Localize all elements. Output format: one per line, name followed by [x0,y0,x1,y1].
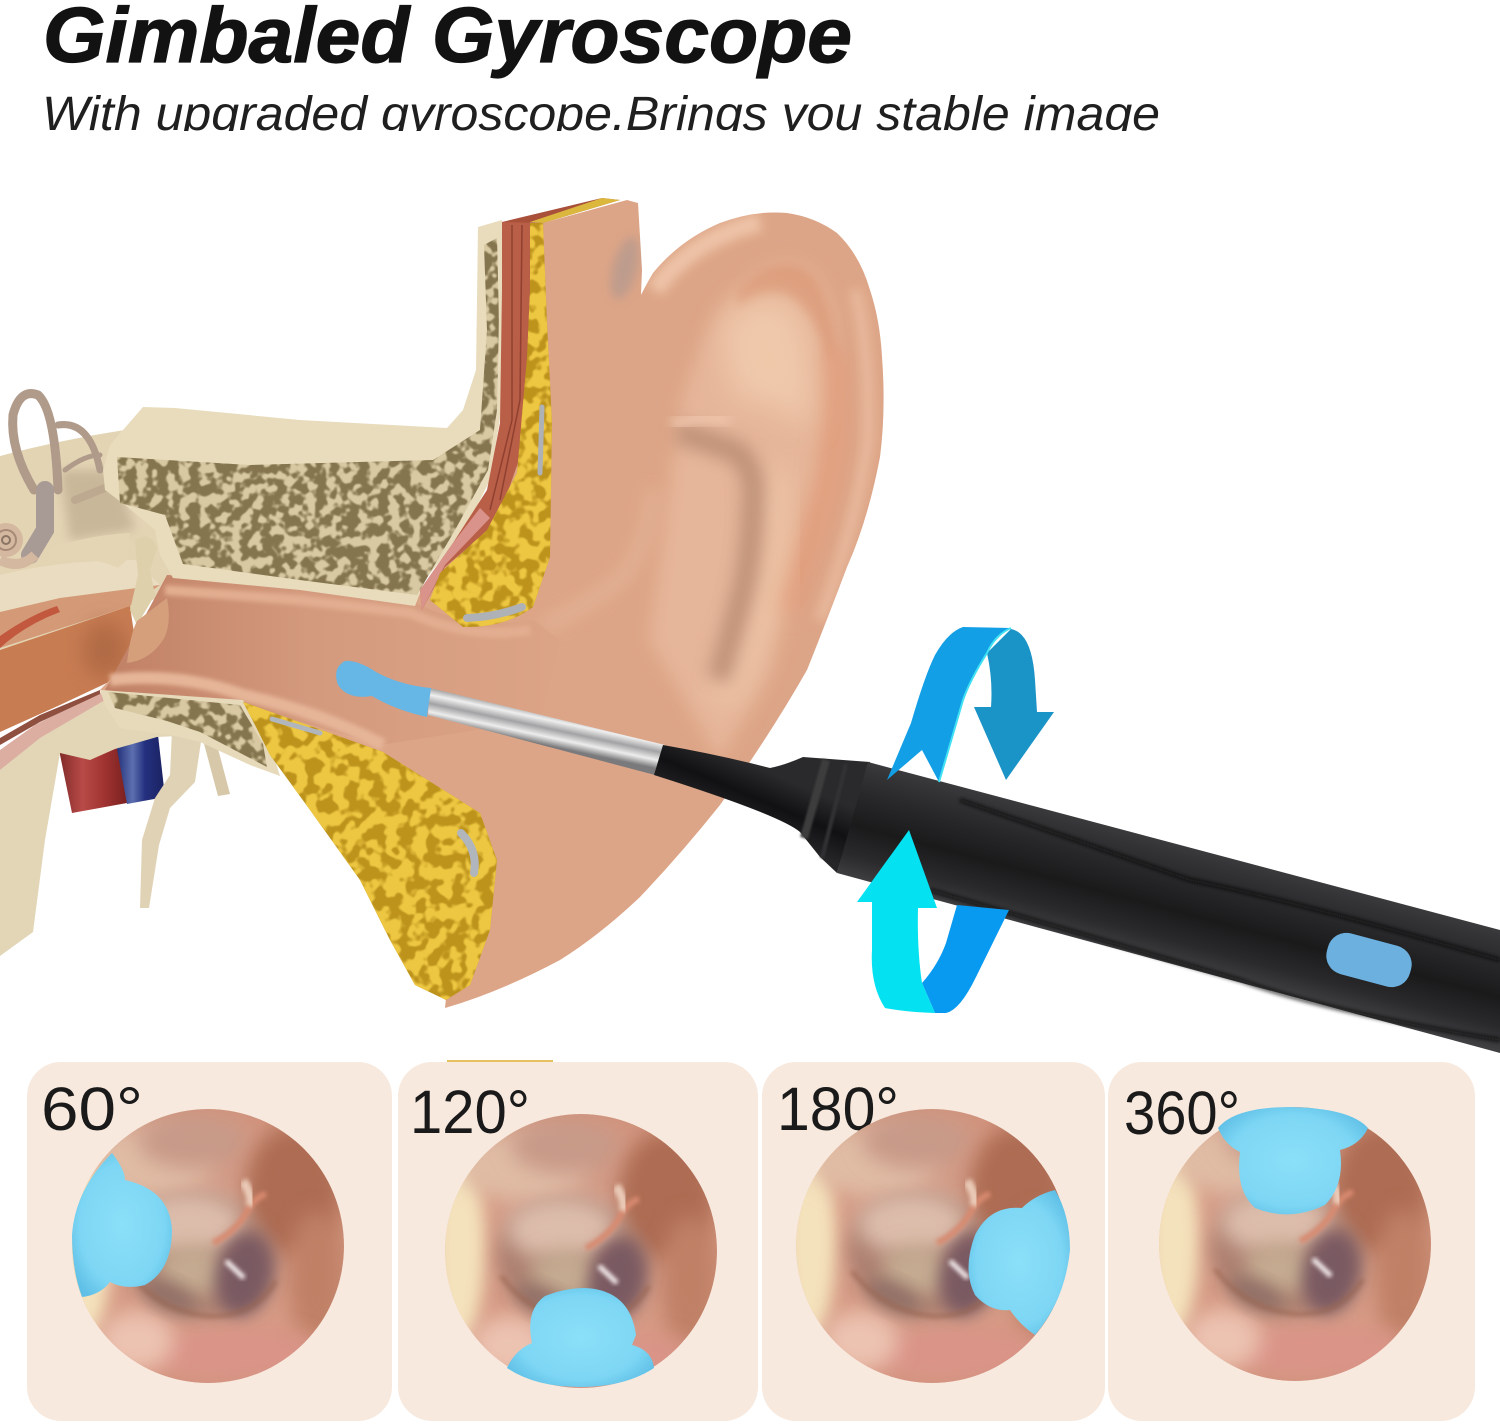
ear canal view 180 [784,1109,1068,1383]
ear canal view 360 [1147,1107,1431,1381]
blue tip 180 [968,1190,1070,1335]
upper cartilage staple [467,407,542,618]
eardrum [127,598,169,663]
blue silicone tip [336,661,431,717]
lower cartilage staples [272,719,475,873]
thin gold line above second panel [447,1060,553,1062]
rotation arrow: bottom [857,830,1009,1013]
handle cone [654,745,870,873]
rotation arrow: top [887,627,1054,782]
blood vessels [58,726,165,813]
silver tube [428,688,665,775]
handle body [837,762,1500,1053]
ear canal view 120 [433,1114,717,1388]
panel: 180 degrees [762,1062,1105,1421]
semicircular canals [13,394,105,555]
label: 60 degrees: 60° [41,1075,143,1143]
label: 120 degrees: 120° [410,1078,530,1146]
ear canal view 60 [60,1109,344,1383]
muscle layer [420,222,530,610]
upper temporal bone [103,220,505,606]
ossicles [50,533,157,625]
tympanic cavity [0,606,135,732]
lower fat tissue [243,702,497,1000]
otoscope ear pick [336,661,1500,1053]
handle grooves [930,800,1500,1040]
styloid processes [140,730,230,908]
ear cross-section illustration [0,198,884,1008]
upper spongy bone [117,238,499,595]
label: 360 degrees: 360° [1124,1079,1240,1147]
lower bone ledge [0,695,180,956]
handle rings [804,760,846,858]
panel: 360 degrees [1108,1062,1475,1421]
blue tip 360 [1218,1107,1368,1214]
blue tip 60 [72,1153,172,1297]
lower temporal bone [100,690,280,776]
label: 180 degrees: 180° [777,1075,899,1143]
cochlea [0,523,35,564]
inner ear labyrinth background bone [0,430,175,650]
lower spongy bone [108,692,267,767]
ear canal [105,575,560,745]
middle ear strip and red muscle line [0,582,160,648]
top cut edge [502,198,620,223]
ear helix fold and concha shading [543,222,868,760]
blue tip 120 [507,1288,654,1387]
blue button [1322,929,1416,991]
subtitle: With upgraded gyroscope.Brings you stable image [42,88,1160,141]
skin of outer ear [100,200,884,1008]
panel: 60 degrees [27,1062,392,1421]
upper fat tissue [430,223,552,627]
panel: 120 degrees [398,1062,758,1421]
